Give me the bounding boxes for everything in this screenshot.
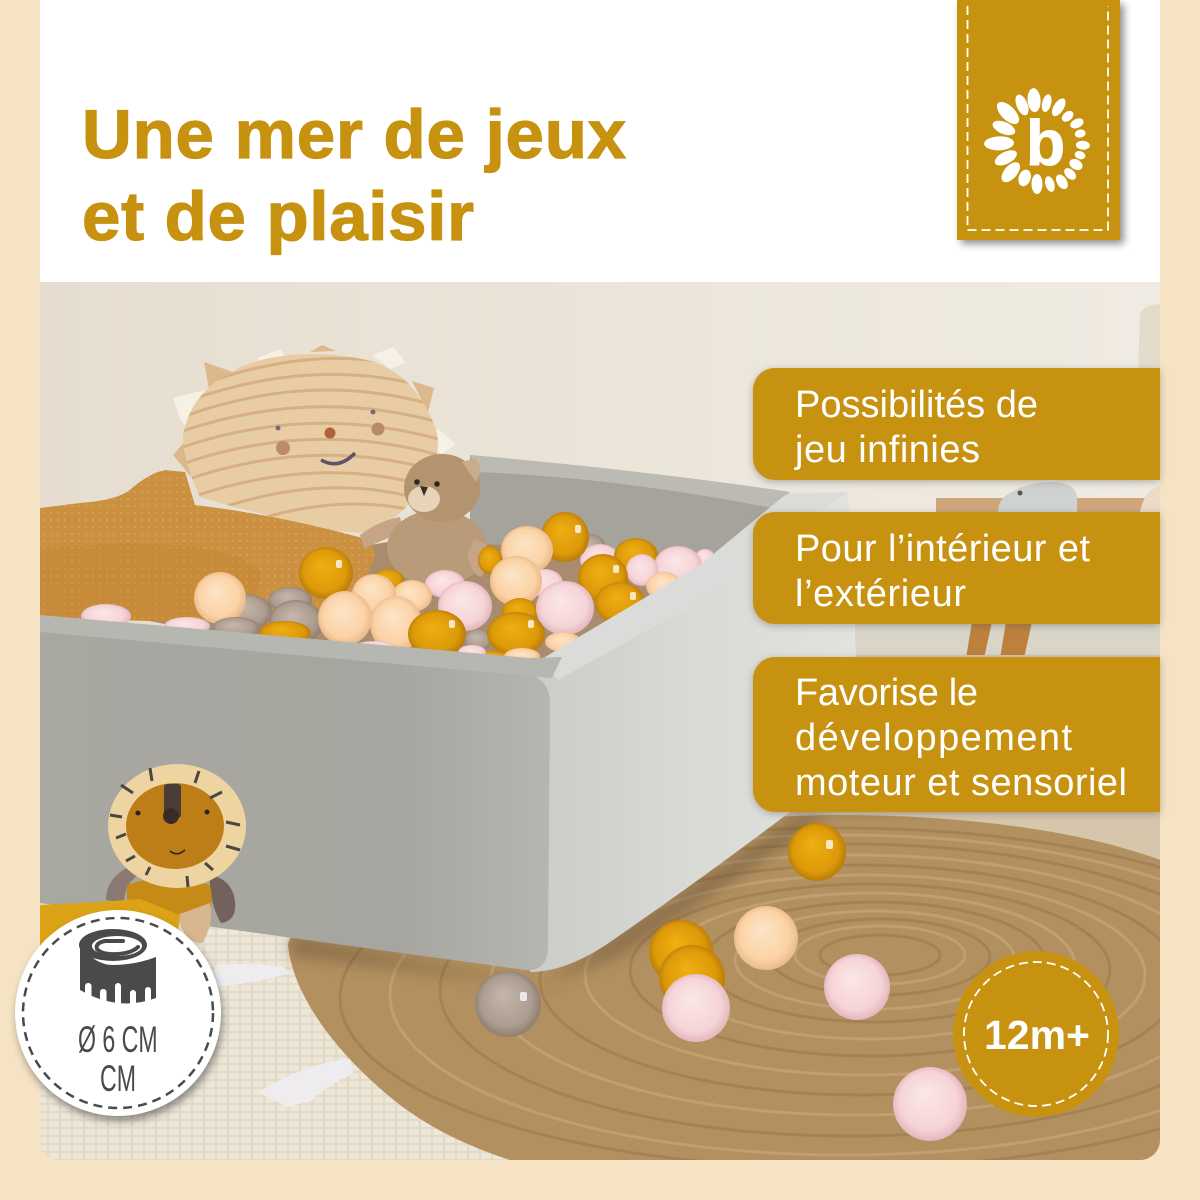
floor balls — [475, 823, 967, 1141]
back rim — [470, 455, 790, 508]
banner 1: Possibilités de — [795, 384, 1038, 426]
wooden legs — [966, 624, 1032, 655]
white woven rug — [40, 903, 510, 1160]
banner 3: développement — [795, 717, 1072, 759]
header panel — [40, 0, 1160, 282]
cream pot on shelf — [1138, 304, 1160, 372]
striped pillow — [173, 345, 456, 533]
banner 1 — [753, 368, 1160, 482]
small mustard blanket — [40, 899, 180, 950]
title — [82, 96, 626, 255]
ball highlights — [336, 525, 636, 628]
logo sun — [984, 88, 1090, 194]
wooden shelf with elephant toy — [936, 482, 1160, 514]
bear toy — [360, 454, 487, 586]
banner 2 — [753, 512, 1160, 626]
back inner wall of ball pit — [470, 455, 790, 554]
orange blanket — [40, 470, 375, 625]
front rim — [40, 615, 562, 678]
banner 3: moteur et sensoriel — [795, 762, 1127, 804]
banner 2: Pour l’intérieur et — [795, 528, 1090, 570]
icon: measuring tape — [79, 929, 156, 1020]
box shadow on rug — [290, 815, 830, 985]
size label: Ø 6 CM — [78, 1018, 158, 1060]
balls in pit — [81, 512, 715, 664]
ball size badge — [15, 910, 223, 1121]
size label: CM — [100, 1057, 136, 1099]
age badge: 12m+ — [984, 1012, 1090, 1058]
jute rug — [288, 815, 1200, 1168]
age badge — [953, 951, 1119, 1117]
right rim highlight — [544, 495, 788, 680]
banner 1: jeu infinies — [794, 429, 980, 471]
banner 3 — [753, 657, 1160, 814]
table below shelf — [855, 624, 1160, 655]
logo tag: b — [1026, 107, 1065, 179]
right side of box — [530, 492, 856, 972]
photo: ball pit scene — [40, 282, 1200, 1168]
logo tag — [957, 0, 1124, 244]
floor — [536, 655, 1160, 1160]
size label — [78, 1018, 158, 1099]
title: et de plaisir — [82, 178, 474, 255]
ball pit interior — [150, 542, 660, 658]
lion toy — [106, 764, 246, 943]
banner 3: Favorise le — [795, 672, 978, 714]
title: Une mer de jeux — [82, 96, 626, 173]
banner 2: l’extérieur — [795, 573, 966, 615]
front of box — [40, 630, 550, 970]
